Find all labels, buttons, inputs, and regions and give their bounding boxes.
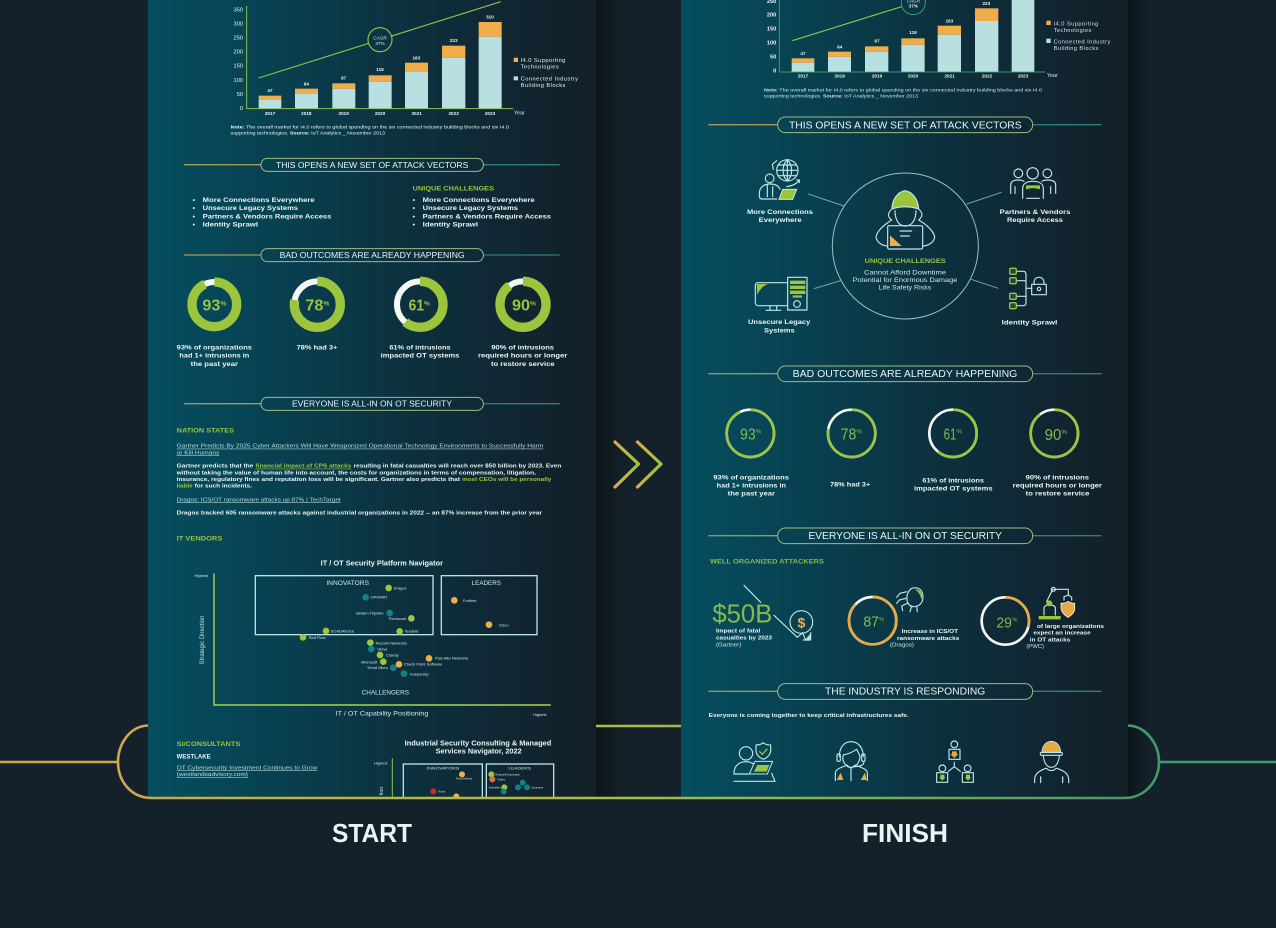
second navigator title: Industrial Security Consulting & Managed bbox=[405, 741, 551, 748]
frame: connector outline bbox=[0, 726, 1276, 798]
donut 61 percent bbox=[397, 281, 443, 327]
bullet list left: • bbox=[193, 213, 196, 220]
section header: all-in: EVERYONE IS ALL-IN ON OT SECURITY bbox=[808, 531, 1003, 542]
central text bbox=[853, 258, 958, 291]
ring captions: 93% of organizations bbox=[713, 475, 789, 482]
bullet list unique challenges: More Connections Everywhere bbox=[423, 197, 535, 204]
bullet list unique challenges: • bbox=[413, 221, 416, 228]
year labels: 2017 bbox=[798, 74, 809, 79]
vendor names: Palo Alto Networks bbox=[435, 656, 468, 661]
Gartner link: or Kill Humans bbox=[177, 450, 220, 456]
legend: I4.0 Supporting bbox=[521, 58, 565, 64]
donut captions: to restore service bbox=[491, 361, 555, 368]
vendor names: Microsoft bbox=[361, 659, 378, 664]
finish: attackers and response bbox=[708, 558, 1104, 783]
second navigator chart bbox=[374, 758, 554, 807]
vendor names: Fortinet bbox=[463, 598, 477, 603]
bullet list left: Identity Sprawl bbox=[203, 221, 258, 228]
bullet list left: Partners & Vendors Require Access bbox=[203, 213, 332, 220]
donut captions: impacted OT systems bbox=[381, 353, 460, 360]
87 percent stat: (Dragos) bbox=[890, 642, 914, 648]
87 percent stat: ransomware attacks bbox=[897, 636, 959, 642]
vendor names: Check Point Software bbox=[404, 661, 443, 666]
y axis labels: 100 bbox=[767, 40, 776, 46]
bullet list left: • bbox=[193, 205, 196, 212]
chart note: Note: The overall market for I4.0 refers to global spending on the six connected industry building blocks and six I4.0 bbox=[231, 125, 510, 130]
vendor names: Red Flow bbox=[309, 635, 326, 640]
Westlake link: (westlandsadvisory.com) bbox=[177, 772, 248, 778]
label: identity sprawl: Identity Sprawl bbox=[1002, 319, 1058, 326]
ring 61 percent: 61 bbox=[944, 426, 956, 443]
year labels: 2021 bbox=[944, 74, 955, 79]
bar value labels: 47 bbox=[267, 88, 273, 93]
navigator axis labels: Strategic Direction bbox=[200, 616, 206, 664]
year labels: 2021 bbox=[411, 111, 422, 116]
Gartner paragraph bbox=[176, 464, 562, 490]
bar value labels: 87 bbox=[874, 39, 880, 44]
Gartner paragraph: Gartner predicts that the bbox=[177, 464, 253, 470]
finish label: FINISH bbox=[862, 818, 948, 848]
ring 93 percent bbox=[727, 410, 774, 457]
ring 93 percent: % bbox=[756, 428, 762, 435]
consultants heading: SI/CONSULTANTS bbox=[177, 741, 241, 748]
bullet list unique challenges: • bbox=[413, 197, 416, 204]
ring captions: impacted OT systems bbox=[914, 485, 993, 492]
donut 78 percent: 78 bbox=[305, 298, 324, 315]
donut 61 percent: 61 bbox=[409, 298, 424, 315]
50B stat: Impact of fatal bbox=[716, 629, 761, 635]
bar value labels: 119 bbox=[909, 30, 917, 35]
ring 90 percent bbox=[1031, 410, 1078, 457]
year axis title: Year bbox=[514, 110, 525, 116]
50B stat: $ bbox=[797, 614, 805, 630]
87 percent stat: 87 bbox=[863, 615, 879, 631]
ring 90 percent: % bbox=[1061, 429, 1067, 436]
arrow: double chevron bbox=[615, 442, 661, 487]
section header: bad outcomes: BAD OUTCOMES ARE ALREADY HAPPENING bbox=[793, 369, 1017, 380]
icon: engineer bbox=[1035, 741, 1069, 783]
bullet list unique challenges bbox=[413, 186, 551, 228]
year labels bbox=[798, 74, 1029, 79]
ring captions: the past year bbox=[728, 491, 775, 498]
quadrant: innovators: INNOVATORS bbox=[326, 581, 369, 587]
vendor names: SCADAfence bbox=[331, 629, 355, 634]
donut captions bbox=[177, 345, 568, 368]
bar value labels bbox=[267, 14, 494, 93]
29 percent stat: in OT attacks bbox=[1030, 637, 1070, 643]
second navigator chart: tion bbox=[379, 787, 385, 795]
CAGR trend line: 37% bbox=[909, 4, 919, 9]
Westlake label: WESTLAKE bbox=[177, 755, 211, 761]
label: more connections: More Connections bbox=[747, 209, 813, 216]
donut 78 percent bbox=[294, 281, 340, 327]
ring captions: 61% of intrusions bbox=[922, 477, 984, 484]
y axis labels: 350 bbox=[234, 7, 243, 13]
vendor dots bbox=[300, 585, 492, 677]
attackers heading: WELL ORGANIZED ATTACKERS bbox=[710, 558, 825, 565]
second navigator chart: Schneider bbox=[489, 786, 501, 790]
Dragos statement: Dragos tracked 605 ransomware attacks against industrial organizations in 2022 -- an 87% increase from the prior year bbox=[177, 511, 543, 517]
response intro text: Everyone is coming together to keep critical infrastructures safe. bbox=[709, 713, 909, 719]
ring 78 percent: % bbox=[856, 428, 862, 435]
quadrant: leaders: LEADERS bbox=[472, 581, 501, 587]
vendor names: Forescout bbox=[389, 616, 407, 621]
bullet list unique challenges: Identity Sprawl bbox=[423, 221, 478, 228]
quadrant: leaders bbox=[441, 576, 537, 635]
navigator axis labels: IT / OT Capability Positioning bbox=[336, 711, 429, 718]
section header: industry responding bbox=[708, 684, 1102, 699]
Westlake link: OT Cybersecurity Investment Continues to Grow bbox=[177, 765, 318, 771]
donut captions: 93% of organizations bbox=[177, 345, 252, 352]
second navigator chart: LEADERS bbox=[508, 766, 531, 771]
donut captions: the past year bbox=[191, 361, 238, 368]
Gartner paragraph: most CEOs will be personally bbox=[462, 477, 552, 483]
donut 78 percent: % bbox=[323, 300, 329, 307]
label: legacy systems: Unsecure Legacy bbox=[748, 319, 811, 326]
bullet list unique challenges: Partners & Vendors Require Access bbox=[423, 213, 551, 220]
second navigator chart: Accenture bbox=[531, 786, 544, 790]
legend: Connected Industry bbox=[1054, 39, 1111, 45]
icon: identity sprawl bbox=[1010, 268, 1046, 309]
central text: Potential for Enormous Damage bbox=[853, 278, 958, 284]
bar value labels: 87 bbox=[341, 76, 347, 81]
legend: Building Blocks bbox=[1054, 46, 1099, 52]
second navigator title: Services Navigator, 2022 bbox=[436, 749, 522, 756]
87 percent stat bbox=[849, 597, 959, 648]
y axis labels: 0 bbox=[773, 69, 776, 75]
29 percent stat: of large organizations bbox=[1037, 624, 1104, 630]
ring captions: 90% of intrusions bbox=[1026, 475, 1089, 482]
central challenge circle bbox=[832, 173, 978, 319]
donut 90 percent bbox=[500, 281, 546, 327]
donut 93 percent: % bbox=[220, 300, 226, 307]
donut 93 percent: 93 bbox=[202, 298, 220, 315]
label: more connections bbox=[747, 209, 813, 224]
y axis labels: 250 bbox=[234, 36, 243, 42]
donut captions: had 1+ intrusions in bbox=[179, 353, 249, 360]
CAGR trend line bbox=[259, 2, 501, 78]
icon: team hierarchy bbox=[937, 741, 973, 782]
icon: protected user bbox=[734, 743, 775, 781]
bar value labels: 163 bbox=[412, 55, 421, 60]
Gartner paragraph: financial impact of CPS attacks bbox=[256, 464, 351, 470]
year labels: 2023 bbox=[485, 111, 496, 116]
second navigator chart: Thales bbox=[497, 777, 506, 781]
legend: Connected Industry bbox=[521, 76, 578, 82]
vendor names: Cisco bbox=[499, 622, 509, 627]
Gartner paragraph: for such incidents. bbox=[195, 484, 252, 490]
y axis labels: 200 bbox=[767, 12, 776, 18]
icon: support agent bbox=[835, 742, 867, 781]
icon: hacker bbox=[876, 191, 935, 249]
donut captions: 78% had 3+ bbox=[297, 345, 337, 352]
second navigator chart: Tetra Defense bbox=[456, 777, 473, 781]
start label: START bbox=[332, 818, 412, 848]
donut 90 percent: 90 bbox=[512, 298, 530, 315]
Dragos link: Dragos: ICS/OT ransomware attacks up 87% | TechTarget bbox=[177, 497, 341, 503]
Gartner paragraph: without taking the value of human life into account, the costs for organizations in terms of compensation, litigation, bbox=[176, 470, 536, 476]
central text: Cannot Afford Downtime bbox=[864, 271, 947, 277]
start: outcomes and OT security text bbox=[176, 249, 568, 517]
central text: UNIQUE CHALLENGES bbox=[865, 258, 946, 265]
icon: partners bbox=[1011, 168, 1056, 198]
y axis labels: 50 bbox=[770, 55, 776, 61]
section header: bad outcomes bbox=[184, 249, 560, 262]
year labels: 2020 bbox=[375, 111, 386, 116]
section header: bad outcomes bbox=[708, 366, 1102, 382]
vendor names: Verve bbox=[377, 646, 388, 651]
year labels: 2023 bbox=[1018, 74, 1029, 79]
bullet list left: • bbox=[193, 221, 196, 228]
connector lines bbox=[808, 192, 1002, 289]
bullet list left bbox=[193, 197, 332, 228]
Gartner paragraph: resulting in fatal casualties will reach over $50 billion by 2023. Even bbox=[354, 464, 562, 470]
section header: all-in bbox=[184, 397, 560, 410]
bullet list unique challenges: • bbox=[413, 213, 416, 220]
panel shadow right bbox=[1128, 0, 1150, 797]
section header: attack vectors: THIS OPENS A NEW SET OF ATTACK VECTORS bbox=[789, 120, 1022, 131]
panel shadow left bbox=[596, 0, 626, 797]
Gartner paragraph: insurance, regulatory fines and reputation loss will be significant. Gartner also predicts that bbox=[177, 477, 460, 483]
chart note: supporting technologies. Source: IoT Analytics _ November 2013 bbox=[231, 130, 386, 135]
50B stat bbox=[712, 585, 813, 648]
bar value labels: 47 bbox=[800, 51, 806, 56]
section header: all-in bbox=[708, 528, 1102, 544]
year labels: 2018 bbox=[301, 111, 312, 116]
29 percent stat: expect an increase bbox=[1033, 631, 1091, 637]
29 percent stat bbox=[982, 597, 1104, 650]
donut captions: 90% of intrusions bbox=[491, 345, 554, 352]
vendor names: Claroty bbox=[386, 652, 399, 657]
year labels: 2022 bbox=[982, 74, 993, 79]
second navigator chart: Fortra bbox=[438, 789, 446, 793]
vendor names: Kaspersky bbox=[410, 671, 429, 676]
y axis labels: 150 bbox=[767, 26, 776, 32]
section header: all-in: EVERYONE IS ALL-IN ON OT SECURITY bbox=[292, 399, 452, 409]
ring 61 percent: % bbox=[956, 428, 962, 435]
ring captions: had 1+ intrusions in bbox=[717, 483, 786, 490]
bar value labels: 64 bbox=[304, 81, 309, 86]
legend: I4.0 Supporting bbox=[1054, 21, 1098, 27]
chart note: supporting technologies. Source: IoT Analytics _ November 2013 bbox=[764, 93, 919, 98]
navigator axis labels: Highest bbox=[195, 573, 209, 578]
y axis labels: 50 bbox=[237, 92, 243, 98]
CAGR trend line bbox=[792, 0, 925, 41]
start: vendors and navigators bbox=[177, 536, 554, 807]
ring 78 percent bbox=[828, 410, 875, 457]
panel: start infographic bbox=[148, 0, 596, 807]
29 percent stat: % bbox=[1012, 618, 1017, 624]
label: partners: Require Access bbox=[1007, 217, 1063, 224]
Gartner link: Gartner Predicts By 2025 Cyber Attackers Will Have Weaponized Operational Technology Environments to Successfully Harm bbox=[177, 444, 544, 450]
navigator title: IT / OT Security Platform Navigator bbox=[321, 561, 443, 568]
navigator axis labels bbox=[195, 573, 547, 718]
stacked bars bbox=[259, 22, 502, 108]
vendor names: Nozomi Networks bbox=[376, 640, 407, 645]
quadrant: innovators bbox=[255, 576, 433, 635]
label: more connections: Everywhere bbox=[759, 217, 802, 224]
ring 90 percent: 90 bbox=[1045, 427, 1061, 444]
bullet list unique challenges: Unsecure Legacy Systems bbox=[423, 205, 518, 212]
y axis labels: 150 bbox=[234, 64, 243, 70]
50B stat: (Gartner) bbox=[716, 642, 742, 648]
label: partners: Partners & Vendors bbox=[1000, 209, 1071, 216]
label: partners bbox=[1000, 209, 1071, 224]
section header: industry responding: THE INDUSTRY IS RESPONDING bbox=[825, 687, 985, 698]
ring 78 percent: 78 bbox=[841, 426, 856, 443]
icon: robot arm and shield bbox=[1039, 587, 1075, 619]
ring 61 percent bbox=[929, 410, 977, 457]
legend: Technologies bbox=[521, 65, 559, 71]
CAGR trend line: 37% bbox=[375, 41, 385, 46]
Gartner paragraph: liable bbox=[177, 484, 193, 490]
start: market chart and challenges bbox=[184, 2, 578, 228]
legend bbox=[514, 58, 578, 89]
nation states heading: NATION STATES bbox=[177, 428, 235, 435]
finish: market chart and attack vectors bbox=[708, 0, 1111, 334]
vendor names: OPSWAT bbox=[371, 595, 388, 600]
bullet list left: • bbox=[193, 197, 196, 204]
vendor names: Trend Micro bbox=[367, 665, 389, 670]
section header: attack vectors: THIS OPENS A NEW SET OF ATTACK VECTORS bbox=[276, 160, 469, 170]
50B stat: casualties by 2023 bbox=[716, 636, 772, 642]
bar value labels: 223 bbox=[450, 38, 458, 43]
section header: attack vectors bbox=[708, 117, 1102, 133]
section header: attack vectors bbox=[184, 158, 560, 171]
vendor names: Belden Tripwire bbox=[356, 611, 384, 616]
29 percent stat: (PWC) bbox=[1026, 644, 1044, 650]
bar value labels: 163 bbox=[945, 18, 954, 23]
y axis labels bbox=[767, 0, 776, 75]
ring captions bbox=[713, 475, 1102, 498]
bar value labels: 310 bbox=[486, 14, 494, 19]
bullet list left: More Connections Everywhere bbox=[203, 197, 315, 204]
chart axes bbox=[779, 0, 1045, 72]
y axis labels: 0 bbox=[240, 106, 243, 112]
ring captions: 78% had 3+ bbox=[830, 481, 870, 488]
ring 93 percent: 93 bbox=[740, 426, 756, 443]
year labels: 2019 bbox=[872, 74, 883, 79]
second navigator title bbox=[405, 741, 551, 756]
chart note bbox=[764, 88, 1043, 98]
year labels: 2017 bbox=[265, 111, 276, 116]
ring captions: to restore service bbox=[1026, 491, 1090, 498]
donut captions: required hours or longer bbox=[478, 353, 568, 360]
label: legacy systems bbox=[748, 319, 811, 334]
CAGR trend line: CAGR bbox=[373, 36, 387, 41]
bullet list left: Unsecure Legacy Systems bbox=[203, 205, 298, 212]
legend bbox=[1046, 21, 1111, 52]
year labels: 2020 bbox=[908, 74, 919, 79]
50B stat: $50B bbox=[712, 598, 772, 628]
navigator axes bbox=[214, 573, 551, 705]
29 percent stat: 29 bbox=[996, 615, 1012, 631]
second navigator chart: Rockwell Automation bbox=[495, 772, 521, 776]
chart note bbox=[231, 125, 510, 135]
second navigator chart: Highest bbox=[374, 760, 388, 765]
donut captions: 61% of intrusions bbox=[389, 345, 451, 352]
legend: Building Blocks bbox=[521, 83, 566, 89]
year labels: 2022 bbox=[448, 111, 459, 116]
section header: bad outcomes: BAD OUTCOMES ARE ALREADY HAPPENING bbox=[280, 250, 465, 260]
y axis labels bbox=[234, 7, 243, 112]
stacked bars bbox=[792, 0, 1034, 72]
bar value labels: 64 bbox=[837, 44, 843, 49]
vendor names: Dragos bbox=[394, 585, 407, 590]
navigator axis labels: Highest bbox=[533, 712, 547, 717]
icon: malware bug bbox=[897, 588, 923, 612]
87 percent stat: % bbox=[879, 617, 884, 623]
central text: Life Safety Risks bbox=[879, 285, 931, 291]
y axis labels: 300 bbox=[234, 21, 243, 27]
chart note: Note: The overall market for I4.0 refers to global spending on the six connected industry building blocks and six I4.0 bbox=[764, 88, 1043, 93]
bar value labels: 223 bbox=[982, 1, 991, 6]
year axis title: Year bbox=[1047, 73, 1058, 79]
bar value labels bbox=[800, 1, 991, 56]
vendor names bbox=[309, 585, 509, 676]
year labels: 2019 bbox=[338, 111, 349, 116]
finish: outcome rings bbox=[708, 366, 1102, 544]
donut 93 percent bbox=[192, 282, 237, 327]
bar value labels: 119 bbox=[376, 67, 384, 72]
label: legacy systems: Systems bbox=[764, 327, 795, 334]
year labels bbox=[265, 112, 495, 115]
panel: finish infographic bbox=[681, 0, 1128, 797]
icon: legacy systems bbox=[755, 277, 807, 310]
chart axes bbox=[247, 6, 513, 109]
bullet list unique challenges: UNIQUE CHALLENGES bbox=[413, 186, 495, 193]
year labels: 2018 bbox=[834, 74, 845, 79]
y axis labels: 100 bbox=[234, 78, 243, 84]
challengers label: CHALLENGERS bbox=[362, 690, 409, 696]
87 percent stat: Increase in ICS/OT bbox=[902, 629, 959, 635]
Westlake link bbox=[177, 765, 318, 778]
legend: Technologies bbox=[1054, 28, 1092, 34]
ring captions: required hours or longer bbox=[1013, 483, 1102, 490]
bullet list unique challenges: • bbox=[413, 205, 416, 212]
second navigator chart: INNOVATORS bbox=[427, 766, 460, 771]
vendor names: Tenable bbox=[405, 629, 419, 634]
icon: connections bbox=[759, 160, 799, 199]
Gartner link bbox=[177, 444, 544, 456]
donut 90 percent: % bbox=[530, 300, 536, 307]
IT vendors heading: IT VENDORS bbox=[177, 536, 223, 543]
donut 61 percent: % bbox=[424, 300, 430, 307]
y axis labels: 200 bbox=[234, 50, 243, 56]
